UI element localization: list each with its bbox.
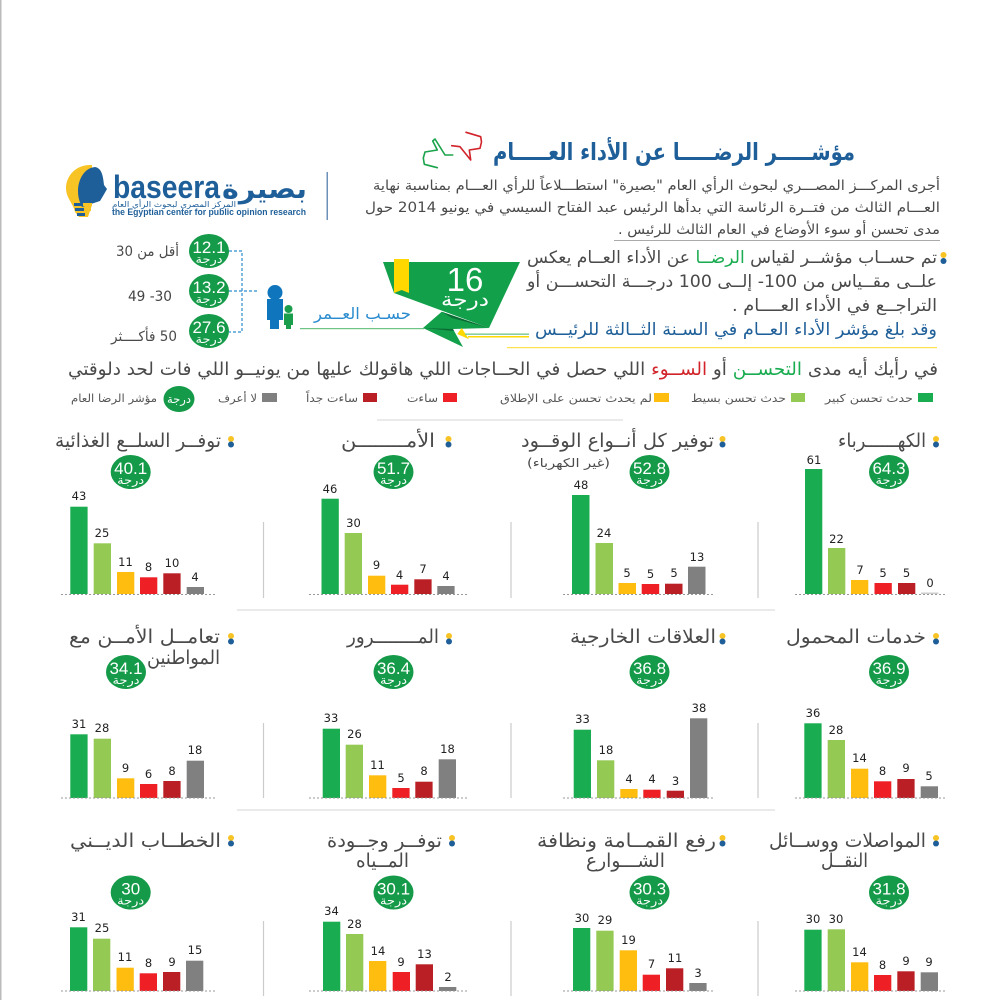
panel: police treatment of citizens: درجة <box>112 673 140 688</box>
panel: electricity: 5 <box>903 566 910 580</box>
age breakdown: أقل من 30 <box>116 242 179 260</box>
panel: foreign relations: العلاقات الخارجية <box>570 626 716 648</box>
legend: حدث تحسن كبير <box>824 392 913 405</box>
panel: police treatment of citizens: 6 <box>145 767 152 781</box>
panel: security: 9 <box>373 558 380 572</box>
legend: مؤشر الرضا العام <box>71 392 157 405</box>
panel: food: 43 <box>72 489 86 503</box>
panel: mobile services: 28 <box>829 723 843 737</box>
panel: garbage and street cleaning: رفع القمــامة ونظافة <box>537 830 716 852</box>
ribbon: overall score 16: 16 <box>447 261 483 298</box>
panel: traffic: 26 <box>347 727 362 741</box>
panel: fuel: 5 <box>623 566 631 580</box>
panel: traffic: 18 <box>440 742 455 756</box>
panel: food: 4 <box>191 570 199 584</box>
panel: transport: 9 <box>925 955 933 969</box>
bullet text: index explanation: التراجــع في الأداء العــــام . <box>732 295 937 316</box>
age breakdown: درجة <box>196 332 222 347</box>
panel: foreign relations: 18 <box>599 743 613 757</box>
panel: food: 11 <box>118 555 133 569</box>
panel: traffic: 33 <box>324 711 338 725</box>
panel: religious discourse: درجة <box>117 894 144 908</box>
panel: garbage and street cleaning: الشـــوارع <box>586 850 665 872</box>
panel: water: توفــر وجــودة <box>327 830 442 852</box>
panel: fuel: 48 <box>574 478 588 492</box>
panel: security: درجة <box>380 473 407 488</box>
bullet text: index explanation: تم حســاب مؤشــر لقياس الرضــا عن الأداء العــام يعكس <box>527 247 937 268</box>
logo: baseera: baseera <box>113 169 220 205</box>
ribbon: overall score 16 <box>383 259 529 347</box>
panel: garbage and street cleaning: 30.3 <box>633 880 666 898</box>
panel: food: 25 <box>95 526 109 540</box>
panel: electricity: الكهــــــرباء <box>838 430 926 452</box>
panel: police treatment of citizens: 28 <box>95 721 109 735</box>
panel: fuel: 13 <box>690 550 704 564</box>
icon: thumbs up and thumbs down <box>423 132 482 168</box>
panel: fuel: 5 <box>670 566 678 580</box>
panel: foreign relations: درجة <box>636 673 663 688</box>
legend <box>71 386 933 412</box>
panel: religious discourse: الخطــاب الديــني <box>70 830 221 852</box>
panel: water: 2 <box>444 970 452 984</box>
panel: garbage and street cleaning: درجة <box>636 894 663 908</box>
panel: foreign relations: 36.8 <box>633 659 666 678</box>
panel: food <box>55 430 234 594</box>
panel: transport: النقــل <box>821 850 868 872</box>
legend: لا أعرف <box>218 391 257 405</box>
panel: religious discourse: 8 <box>145 956 152 970</box>
panel: religious discourse: 30 <box>121 880 140 898</box>
panel: religious discourse: 31 <box>71 910 86 924</box>
panel: transport: 14 <box>852 945 867 959</box>
panel: water: 30.1 <box>377 880 410 898</box>
panel: fuel: (غير الكهرباء) <box>527 456 610 471</box>
age breakdown <box>110 234 259 348</box>
age breakdown: 13.2 <box>192 278 226 297</box>
panel: garbage and street cleaning: 29 <box>598 913 612 927</box>
panel: garbage and street cleaning: 11 <box>668 951 682 965</box>
panel: police treatment of citizens <box>61 625 234 798</box>
title: مؤشـــــر الرضـــــا عن الأداء العـــــام <box>493 137 855 166</box>
panel: foreign relations <box>563 626 726 798</box>
age breakdown: درجة <box>196 292 222 307</box>
panel: transport: 30 <box>829 912 843 926</box>
panel: mobile services: درجة <box>876 673 902 688</box>
panel: traffic: المــــــــرور <box>346 626 439 648</box>
panel: mobile services <box>786 626 947 798</box>
panel: food: 8 <box>145 560 152 574</box>
icon: adult and child <box>267 285 293 329</box>
logo: baseera: المركز المصري لبحوث الرأي العام <box>112 199 236 209</box>
panel: traffic: 11 <box>370 758 385 772</box>
panel: food: توفــر السلــع الغذائية <box>55 430 221 452</box>
panel: traffic: درجة <box>380 673 407 688</box>
panel: electricity: 5 <box>879 566 887 580</box>
intro text: العـــام الثالث من فتــرة الرئاسة التي بدأها الرئيس عبد الفتاح السيسي في يونيو 2014 حول <box>365 198 940 216</box>
panel: police treatment of citizens: 9 <box>122 761 129 775</box>
age breakdown: 12.1 <box>192 238 226 257</box>
panel: foreign relations: 3 <box>672 774 679 788</box>
panel: traffic: 8 <box>420 764 428 778</box>
panel: foreign relations: 4 <box>648 772 656 786</box>
panel: electricity: 7 <box>856 563 864 577</box>
panel: security <box>309 429 468 594</box>
panel: police treatment of citizens: 31 <box>72 717 86 731</box>
age breakdown: 27.6 <box>192 318 226 337</box>
panel: electricity: درجة <box>876 473 902 488</box>
panel: foreign relations: 4 <box>625 772 633 786</box>
age breakdown: 49 -30 <box>128 289 172 305</box>
panel: religious discourse: 15 <box>188 943 202 957</box>
panel: garbage and street cleaning <box>537 830 726 991</box>
panel: garbage and street cleaning: 3 <box>694 966 702 980</box>
panel: food: 40.1 <box>114 459 147 478</box>
panel: garbage and street cleaning: 30 <box>575 911 589 925</box>
panel: electricity: 61 <box>807 453 821 467</box>
panel: electricity: 0 <box>926 576 934 590</box>
panel: mobile services: 36 <box>806 706 820 720</box>
panel: foreign relations: 33 <box>575 712 590 726</box>
survey question: في رأيك أيه مدى التحســن أو الســوء اللي حصل في الحــاجات اللي هاقولك عليها من يونيــو اللي فات لحد دلوقتي <box>68 357 938 380</box>
panel: mobile services: 36.9 <box>872 659 906 678</box>
panel: transport: المواصلات ووســائل <box>769 830 926 852</box>
panel: water: درجة <box>380 894 407 908</box>
panel: transport <box>769 830 947 991</box>
panel: mobile services: خدمات المحمول <box>786 626 926 648</box>
panel: security: 4 <box>396 568 403 582</box>
panel: fuel: درجة <box>636 473 663 488</box>
panel: foreign relations: 38 <box>692 701 706 715</box>
panel: transport: 31.8 <box>872 880 906 898</box>
panel: police treatment of citizens: 18 <box>188 743 202 757</box>
panel: police treatment of citizens: تعامــل الأمــن مع <box>69 625 220 648</box>
panel: water: 14 <box>371 944 385 958</box>
panel: water: 9 <box>397 955 405 969</box>
panel: garbage and street cleaning: 7 <box>648 957 655 971</box>
age breakdown: 50 فأكــــثر <box>110 326 177 345</box>
panel: police treatment of citizens: 8 <box>168 764 176 778</box>
panel: fuel: 5 <box>647 567 654 581</box>
panel: mobile services: 8 <box>879 764 886 778</box>
panel: fuel <box>521 428 726 594</box>
bullet text: index explanation: علــى مقــياس من 100- إلــى 100 درجـــة التحســـن أو <box>526 270 937 292</box>
legend: لم يحدث تحسن على الإطلاق <box>500 392 652 405</box>
legend: ساءت <box>407 392 438 405</box>
panel: transport: 8 <box>879 958 886 972</box>
age breakdown: درجة <box>196 252 222 267</box>
panel: food: درجة <box>117 473 144 488</box>
intro text: مدى تحسن أو سوء الأوضاع في العام الثالث للرئيس . <box>618 220 940 238</box>
panel: security: 7 <box>419 562 427 576</box>
intro text: أجرى المركـــز المصـــري لبحوث الرأي العام "بصيرة" استطـــلاعاً للرأي العـــام بمناسبة نهاية <box>373 175 940 194</box>
panel: water: 28 <box>347 917 362 931</box>
intro text <box>365 175 940 238</box>
panel: water: 13 <box>417 947 432 961</box>
panel: security: الأمــــــــن <box>341 429 435 452</box>
panel: security: 30 <box>346 516 361 530</box>
panel: security: 51.7 <box>377 459 410 478</box>
panel: religious discourse <box>61 830 234 991</box>
logo: baseera: the Egyptian center for public opinion research <box>112 207 306 218</box>
panel: religious discourse: 9 <box>168 955 176 969</box>
panel: police treatment of citizens: المواطنين <box>147 647 220 669</box>
panel: garbage and street cleaning: 19 <box>621 933 636 947</box>
logo: baseera <box>66 165 307 218</box>
panel: security: 4 <box>442 569 450 583</box>
bullet text: index explanation: وقد بلغ مؤشر الأداء العــام في السـنة الثــالثة للرئيــس <box>535 319 937 340</box>
panel: police treatment of citizens: 34.1 <box>109 659 143 678</box>
panel: electricity: 64.3 <box>872 459 906 478</box>
panel: fuel: 52.8 <box>633 459 666 478</box>
panel: water: المــياه <box>356 850 409 872</box>
panel: electricity: 22 <box>829 532 844 546</box>
panel: transport: درجة <box>876 894 902 908</box>
panel: transport: 30 <box>806 912 820 926</box>
panel: mobile services: 5 <box>925 769 933 783</box>
panel: mobile services: 9 <box>902 761 910 775</box>
panel: religious discourse: 11 <box>118 950 132 964</box>
panel: traffic <box>309 626 468 798</box>
legend: ساءت جداً <box>306 390 358 405</box>
panel: traffic: 36.4 <box>377 659 410 678</box>
panel: fuel: 24 <box>597 526 611 540</box>
panel: religious discourse: 25 <box>95 921 109 935</box>
panel: water <box>309 830 468 991</box>
legend: حدث تحسن بسيط <box>691 392 786 405</box>
panel: traffic: 5 <box>397 771 405 785</box>
age label: حسـب العــمر <box>313 304 411 324</box>
panel: water: 34 <box>324 904 339 918</box>
panel: electricity <box>795 430 947 594</box>
panel: security: 46 <box>323 482 337 496</box>
logo: baseera: بصيرة <box>222 174 307 205</box>
panel: food: 10 <box>165 556 179 570</box>
panel: transport: 9 <box>902 954 910 968</box>
legend: درجة <box>167 392 191 407</box>
panel: mobile services: 14 <box>852 751 867 765</box>
ribbon: overall score 16: درجة <box>441 289 489 311</box>
panel: fuel: توفير كل أنــواع الوقــود <box>521 428 714 452</box>
bullet text: index explanation <box>526 247 946 340</box>
